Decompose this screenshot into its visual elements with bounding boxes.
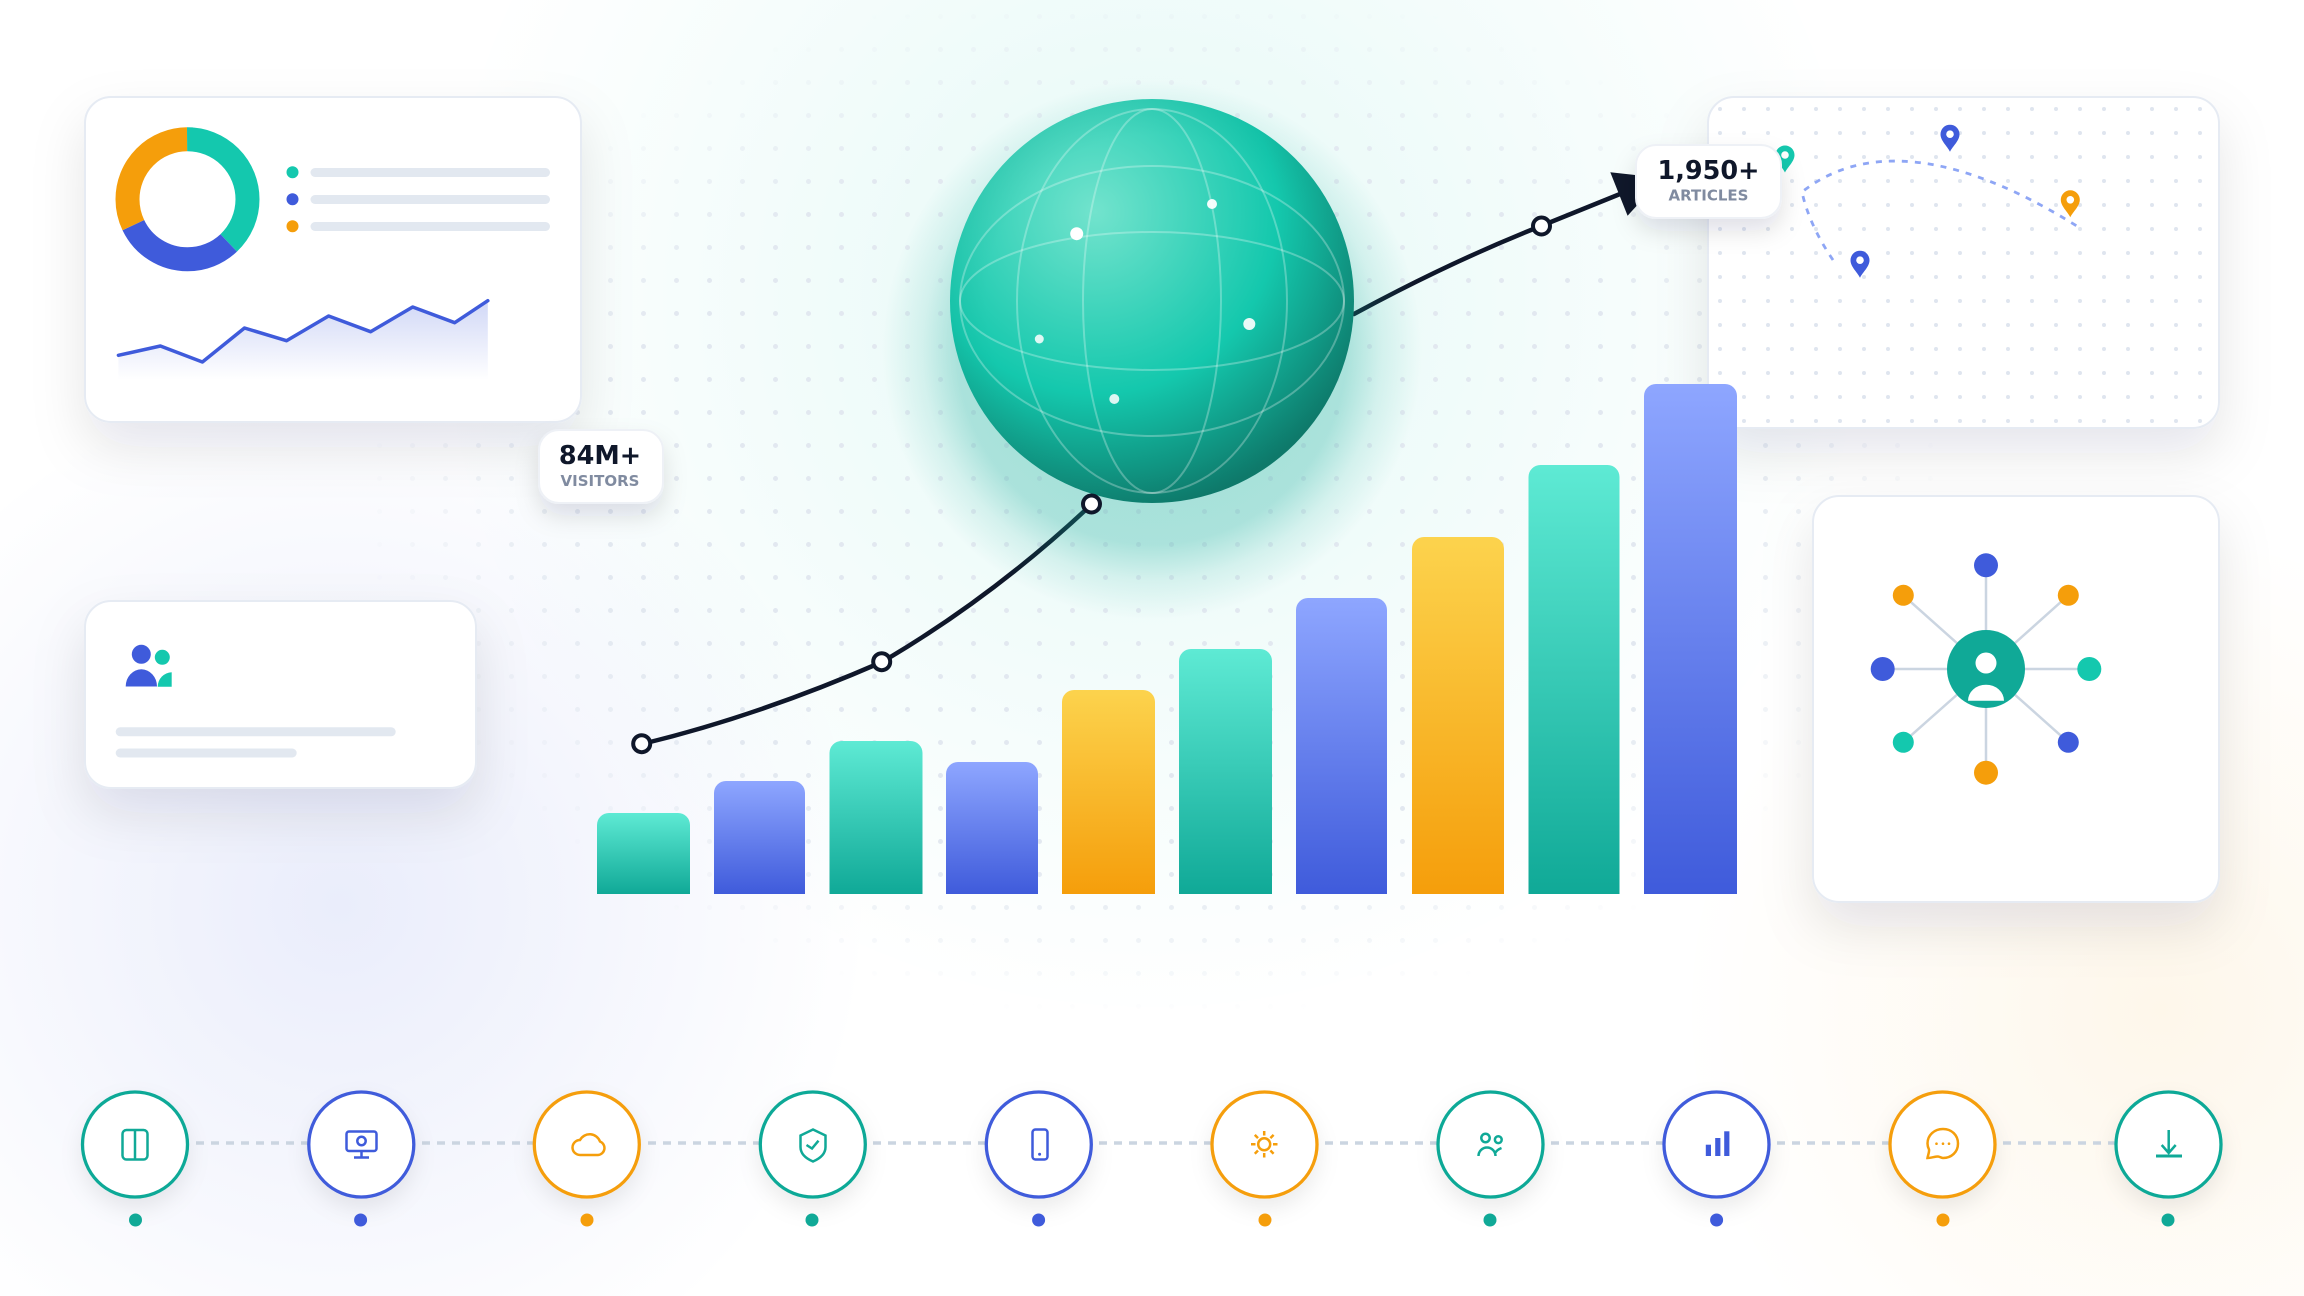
line markers: [633, 218, 1550, 752]
callout: articles: [1636, 145, 1781, 218]
arrow head: [1610, 172, 1662, 216]
network nodes: [1871, 553, 2101, 785]
icon: central person: [1947, 630, 2025, 708]
callout: visitors: [539, 430, 663, 503]
network links: [1883, 565, 2089, 773]
icon: cloud: [534, 1092, 639, 1226]
icon: sun: [1212, 1092, 1317, 1226]
icon: chat: [1890, 1092, 1995, 1226]
globe: [882, 80, 1422, 620]
panel: network diagram: [1813, 496, 2219, 902]
legend: [286, 166, 550, 232]
growth line: [642, 192, 1625, 744]
dashed route: [1802, 161, 2080, 260]
pin: blue south: [1850, 251, 1870, 278]
globe grid: [960, 109, 1344, 493]
callout: visitors: VISITORS: [561, 472, 639, 490]
globe location dots: [1035, 199, 1255, 404]
icon: panels: [82, 1092, 188, 1226]
icon: users: [1438, 1092, 1543, 1226]
pin: teal: [1776, 146, 1794, 172]
text placeholder lines: [116, 727, 396, 758]
connector dashes: [196, 1141, 2120, 1145]
bar chart: [597, 384, 1737, 894]
icon row: [82, 1092, 2221, 1226]
callout: articles: 1,950+: [1657, 156, 1760, 186]
panel: map with pins: [1708, 97, 2219, 428]
icon: bars: [1664, 1092, 1769, 1226]
callout: visitors: 84M+: [559, 441, 641, 471]
icon: phone: [986, 1092, 1091, 1226]
icon: download: [2116, 1092, 2221, 1226]
donut chart: [128, 139, 247, 259]
pin: orange: [2061, 190, 2080, 217]
icon: monitor: [309, 1092, 414, 1226]
sparkline: [118, 301, 488, 380]
icon: shield: [760, 1092, 865, 1226]
icon: people: [126, 645, 172, 687]
pin: blue north: [1940, 125, 1960, 152]
panel: donut and sparkline dashboard: [85, 97, 581, 422]
callout: articles: ARTICLES: [1669, 187, 1748, 205]
panel: audience card: [85, 601, 476, 788]
